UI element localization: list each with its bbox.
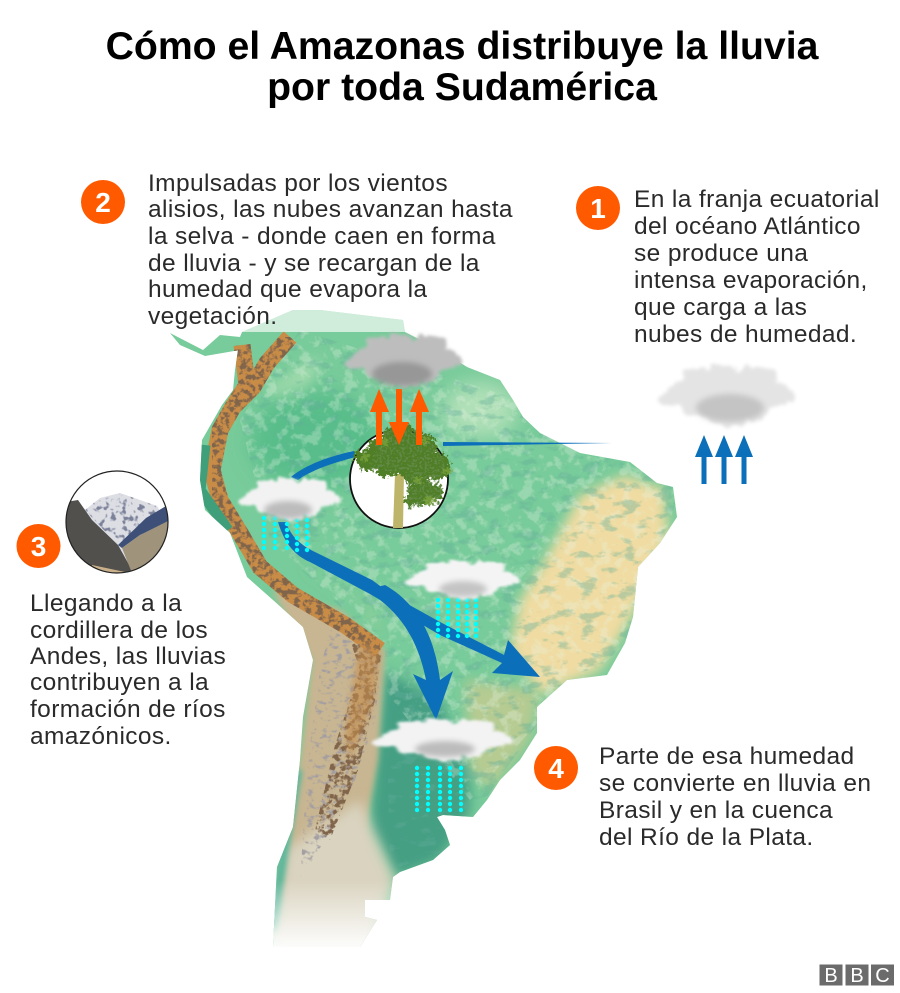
BBC logo: B xyxy=(824,965,838,987)
photo mottled shadows on peak xyxy=(85,494,156,541)
step 3 text: contribuyen a la xyxy=(30,669,209,696)
step 3 text: cordillera de los xyxy=(30,617,208,644)
title xyxy=(106,25,820,109)
blue arrow: evaporation right xyxy=(735,435,753,484)
map base land colour xyxy=(160,300,690,960)
map region: Chilean coast teal xyxy=(272,770,298,930)
step 2 text: de lluvia - y se recargan de la xyxy=(148,250,480,277)
cloud: Atlantic xyxy=(660,365,794,428)
step 1 text: intensa evaporación, xyxy=(634,267,868,294)
step 3 text xyxy=(30,590,226,750)
cloud: over rainforest xyxy=(346,334,462,388)
blue arrow: evaporation middle xyxy=(715,435,733,484)
step 4 text: Brasil y en la cuenca xyxy=(599,797,833,824)
step 1 text xyxy=(634,186,880,348)
title: Cómo el Amazonas distribuye la lluvia xyxy=(106,25,820,68)
step 1 text: se produce una xyxy=(634,240,808,267)
step 2 text: alisios, las nubes avanzan hasta xyxy=(148,196,513,223)
step 1 badge xyxy=(576,186,620,230)
tree trunk xyxy=(393,474,404,528)
tree leaf shadows xyxy=(370,428,445,510)
rain: La Plata basin xyxy=(417,768,461,813)
step 2 text: Impulsadas por los vientos xyxy=(148,170,448,197)
orange arrow: evaporation up right xyxy=(410,389,429,445)
map: South America relief xyxy=(160,300,690,960)
orange arrow: rain down xyxy=(389,389,409,445)
tree highlights xyxy=(361,436,452,505)
tree photo in circle xyxy=(350,423,452,528)
step 1 badge: 1 xyxy=(590,193,606,224)
photo: Andes mountains xyxy=(66,493,168,572)
map region: Chaco and pampas xyxy=(370,670,470,878)
step 2 text: vegetación. xyxy=(148,303,278,330)
step 3 text: amazónicos. xyxy=(30,723,172,750)
photo dark rock xyxy=(66,500,132,575)
tree circle xyxy=(350,430,448,528)
map region: eastern Brazil highlands xyxy=(510,475,668,695)
photo snowy peak xyxy=(85,493,160,562)
terrain: pale mottling xyxy=(240,330,680,800)
terrain: dark green veins xyxy=(240,330,680,870)
map region: pale Guyana shield xyxy=(442,382,518,438)
blue arrow: evaporation left xyxy=(695,435,713,484)
photo ring xyxy=(66,471,168,573)
step 2 badge xyxy=(81,180,125,224)
map region: pale Andean foothills xyxy=(265,356,321,402)
map region: eastern foothills yellow green xyxy=(365,608,378,625)
step 2 text xyxy=(148,170,513,330)
step 4 badge xyxy=(534,746,578,790)
BBC logo: B xyxy=(850,965,864,987)
moisture flow: curve from tree to Andes xyxy=(291,451,356,480)
step 4 text: se convierte en lluvia en xyxy=(599,770,871,797)
cloud: Andes xyxy=(240,478,340,521)
BBC logo: C xyxy=(875,965,890,987)
orange arrow: evaporation up left xyxy=(370,389,389,445)
step 2 text: la selva - donde caen en forma xyxy=(148,223,496,250)
step 3 text: Andes, las lluvias xyxy=(30,643,226,670)
photo sky xyxy=(66,471,168,573)
step 4 badge: 4 xyxy=(548,753,564,784)
rain: Andes xyxy=(264,514,307,554)
step 1 text: En la franja ecuatorial xyxy=(634,186,880,213)
step 4 text: Parte de esa humedad xyxy=(599,743,854,770)
map region: central Amazon green xyxy=(250,390,380,490)
map region: southern Brazil highlands xyxy=(465,680,540,790)
title: por toda Sudamérica xyxy=(267,66,658,109)
moisture flow: thin line from Atlantic to tree xyxy=(443,442,612,446)
map: white fade at northern coast xyxy=(242,310,405,332)
step 3 badge xyxy=(16,524,60,568)
photo blue ridge xyxy=(118,506,170,548)
step 4 text xyxy=(599,743,871,851)
map region: Patagonia xyxy=(270,800,395,950)
moisture flow: ribbon toward eastern arrow xyxy=(278,522,540,677)
step 3 text: Llegando a la xyxy=(30,590,182,617)
step 1 text: del océano Atlántico xyxy=(634,213,861,240)
map: white fade toward southern tip xyxy=(273,884,392,947)
tree crown xyxy=(353,423,450,506)
photo tan foreground xyxy=(122,521,168,570)
step 2 badge: 2 xyxy=(95,187,111,218)
BBC logo xyxy=(820,964,894,987)
step 1 text: nubes de humedad. xyxy=(634,321,857,348)
cloud: La Plata basin xyxy=(374,719,512,762)
step 2 text: humedad que evapora la xyxy=(148,276,427,303)
step 3 text: formación de ríos xyxy=(30,696,226,723)
map region: central Andes altiplano xyxy=(272,590,385,900)
step 1 text: que carga a las xyxy=(634,294,807,321)
map region: Andes range xyxy=(200,337,382,880)
cloud: central Brazil xyxy=(407,560,519,600)
arrow: flow to La Plata basin xyxy=(365,585,453,720)
step 4 text: del Río de la Plata. xyxy=(599,824,814,851)
rain: central Brazil xyxy=(438,600,476,640)
step 3 badge: 3 xyxy=(31,531,46,562)
